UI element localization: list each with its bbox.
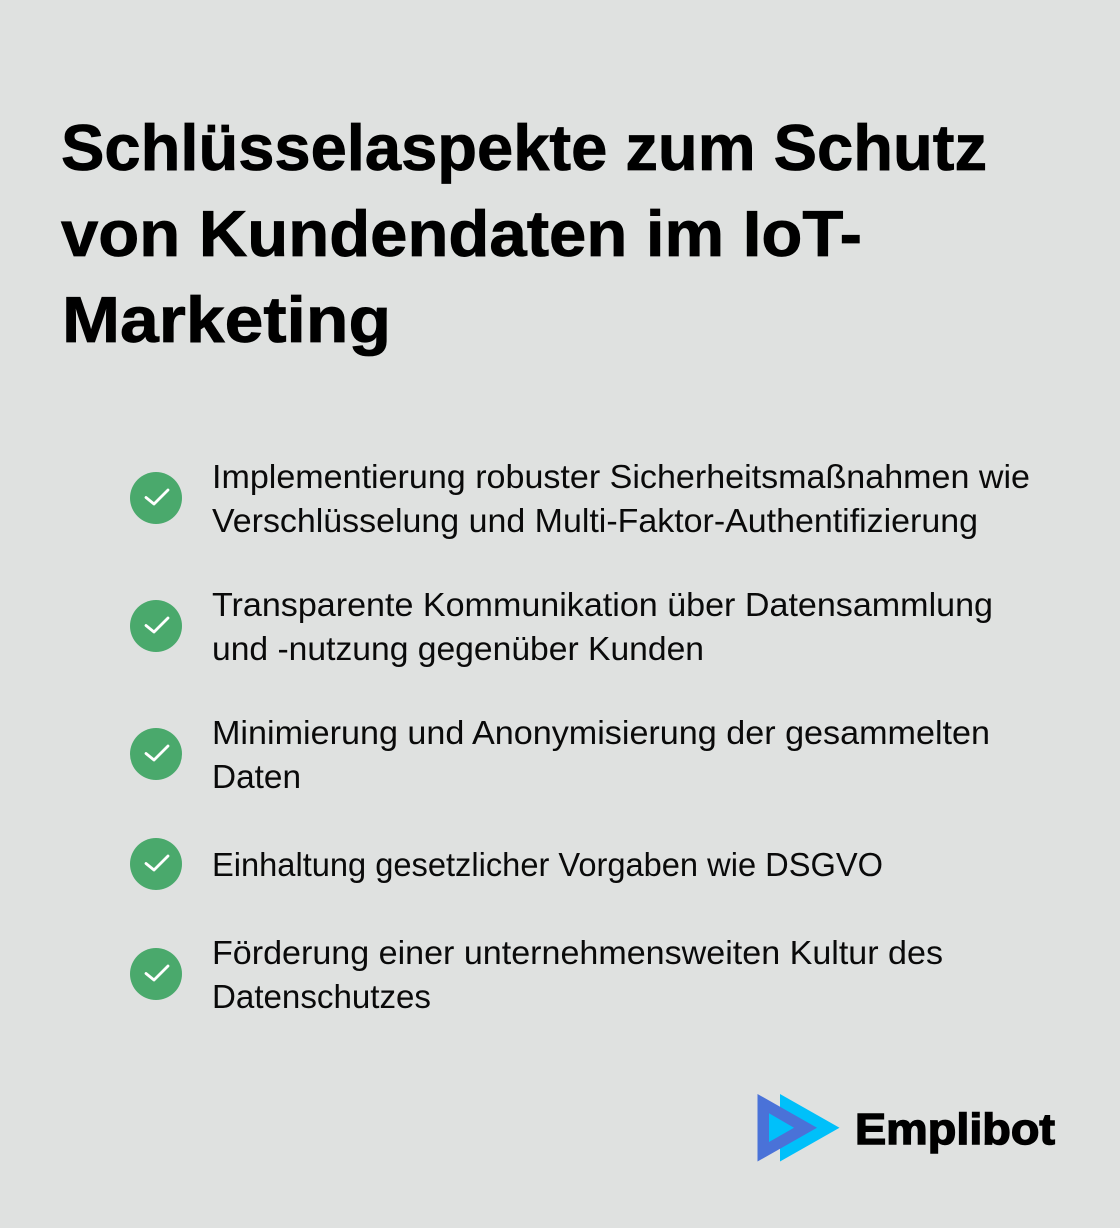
item 2	[130, 586, 993, 667]
item 3: Minimierung und Anonymisierung der gesammelten	[212, 714, 990, 751]
item 1: Verschlüsselung und Multi-Faktor-Authentifizierung	[212, 502, 978, 539]
item 5: Förderung einer unternehmensweiten Kultur des	[212, 934, 943, 971]
icon: play triangles	[758, 1094, 840, 1162]
item 2: und -nutzung gegenüber Kunden	[212, 630, 704, 667]
title: Marketing	[62, 283, 391, 356]
title	[61, 111, 987, 356]
item 3	[130, 714, 990, 795]
title: von Kundendaten im IoT-	[61, 197, 862, 270]
item 3: Daten	[212, 758, 301, 795]
logo: Emplibot	[758, 1094, 1055, 1162]
item 5: Datenschutzes	[212, 978, 431, 1015]
item 1: Implementierung robuster Sicherheitsmaßnahmen wie	[212, 458, 1030, 495]
item 1	[130, 458, 1030, 539]
checklist	[130, 458, 1030, 1015]
title: Schlüsselaspekte zum Schutz	[61, 111, 987, 184]
item 4: Einhaltung gesetzlicher Vorgaben wie DSGVO	[212, 846, 883, 883]
item 2: Transparente Kommunikation über Datensammlung	[212, 586, 993, 623]
item 5	[130, 934, 943, 1015]
wordmark: Emplibot	[855, 1105, 1055, 1154]
item 4	[130, 838, 883, 890]
